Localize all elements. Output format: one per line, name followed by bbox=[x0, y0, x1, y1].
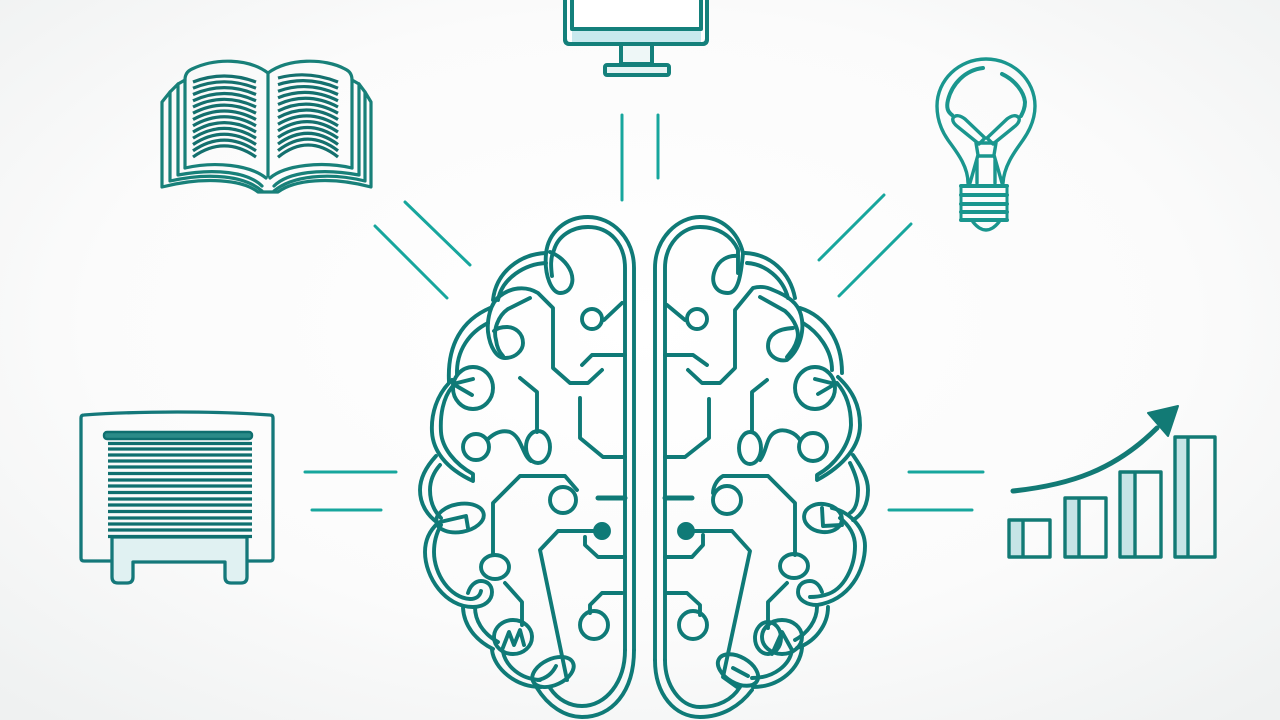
stripes bbox=[104, 432, 252, 536]
right hemisphere bbox=[655, 217, 868, 717]
connector rays bbox=[305, 115, 983, 510]
page text lines bbox=[193, 75, 338, 157]
icon: rising bar chart bbox=[1009, 406, 1215, 557]
ray pair: bar chart bbox=[889, 472, 983, 510]
ray pair: book bbox=[375, 202, 470, 298]
icon: light bulb bbox=[937, 59, 1035, 230]
ray pair: monitor bbox=[622, 115, 658, 200]
bar 3 bbox=[1120, 472, 1161, 557]
ray pair: document panel bbox=[305, 472, 396, 510]
brain illustration bbox=[420, 217, 868, 717]
left hemisphere bbox=[420, 217, 634, 717]
icon: document panel with stripes bbox=[81, 412, 273, 583]
icon: monitor bbox=[565, 0, 707, 75]
bar 2 bbox=[1065, 498, 1106, 557]
ray pair: light bulb bbox=[819, 195, 911, 296]
bar 4 bbox=[1175, 437, 1215, 557]
icon: open book bbox=[162, 61, 371, 192]
bar 1 bbox=[1009, 520, 1050, 557]
screw base bbox=[961, 186, 1007, 220]
growth arrow bbox=[1013, 406, 1178, 491]
